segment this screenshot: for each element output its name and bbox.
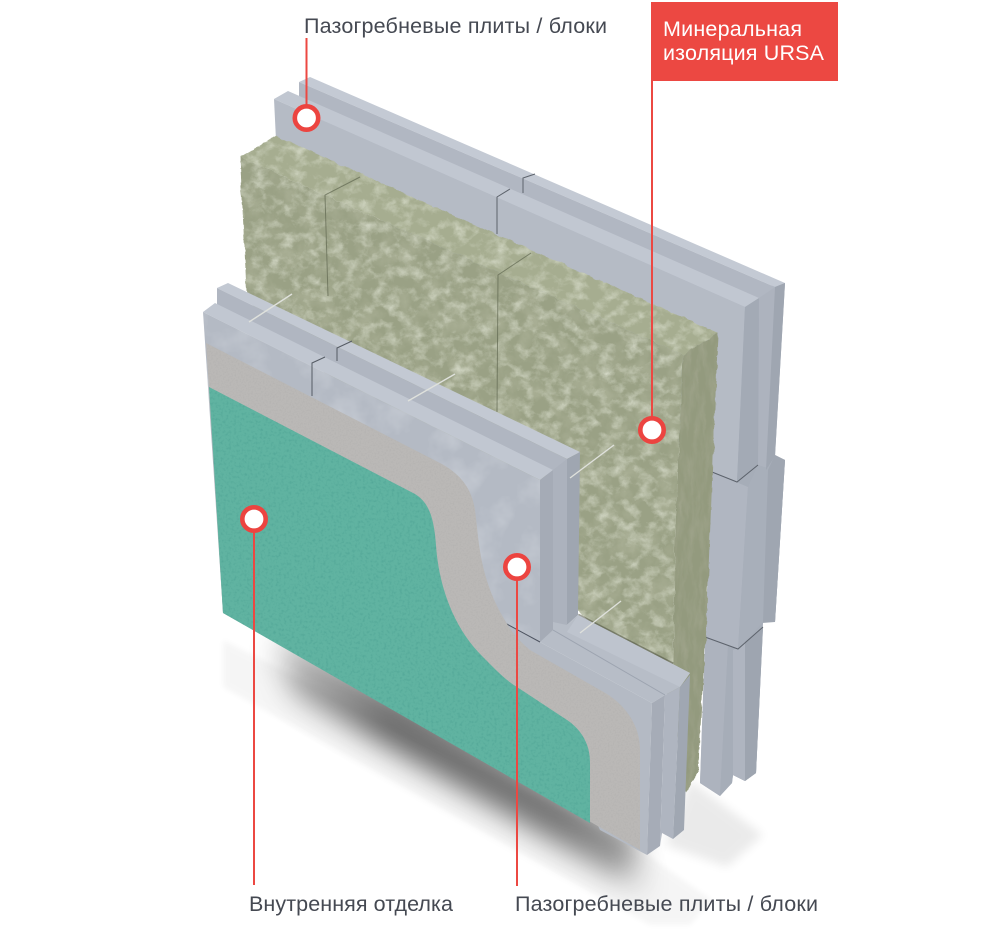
rear upper block — [274, 91, 759, 482]
wall construction infographic — [203, 2, 838, 922]
wool top face — [235, 130, 725, 360]
red label box — [651, 2, 838, 81]
callout: top tongue-and-groove label: Пазогребневые плиты / блоки — [304, 14, 607, 38]
wool front face — [235, 150, 690, 705]
label text: Минеральная — [663, 17, 802, 41]
rear upper tongue — [299, 77, 785, 470]
rear middle block — [705, 455, 785, 649]
callout: bottom tongue-and-groove label — [505, 555, 818, 916]
callout: interior finish — [242, 507, 453, 916]
front joints — [312, 341, 352, 396]
rear block joints — [497, 174, 763, 649]
rear lower block — [700, 627, 763, 796]
front lower block — [503, 615, 690, 855]
wool slab joints — [325, 177, 531, 412]
callout: mineral insulation URSA — [640, 2, 838, 442]
floor shadow — [223, 625, 763, 925]
front block side — [540, 470, 553, 642]
front tongue — [217, 283, 580, 630]
rear block wall — [274, 77, 785, 796]
front upper block — [200, 300, 553, 645]
metal wall ties — [249, 294, 621, 633]
callout: top tongue-and-groove label — [295, 14, 607, 130]
teal interior finish — [205, 380, 595, 830]
mineral wool insulation — [235, 130, 725, 800]
label text: изоляция URSA — [663, 41, 825, 65]
rear stack backing — [700, 283, 785, 796]
plaster layer — [200, 335, 645, 855]
callout: interior finish: Внутренняя отделка — [249, 892, 453, 916]
wool side face — [670, 330, 720, 800]
wool body — [235, 130, 725, 800]
callout: bottom tongue-and-groove label: Пазогребневые плиты / блоки — [515, 892, 818, 916]
front block wall — [200, 283, 690, 855]
